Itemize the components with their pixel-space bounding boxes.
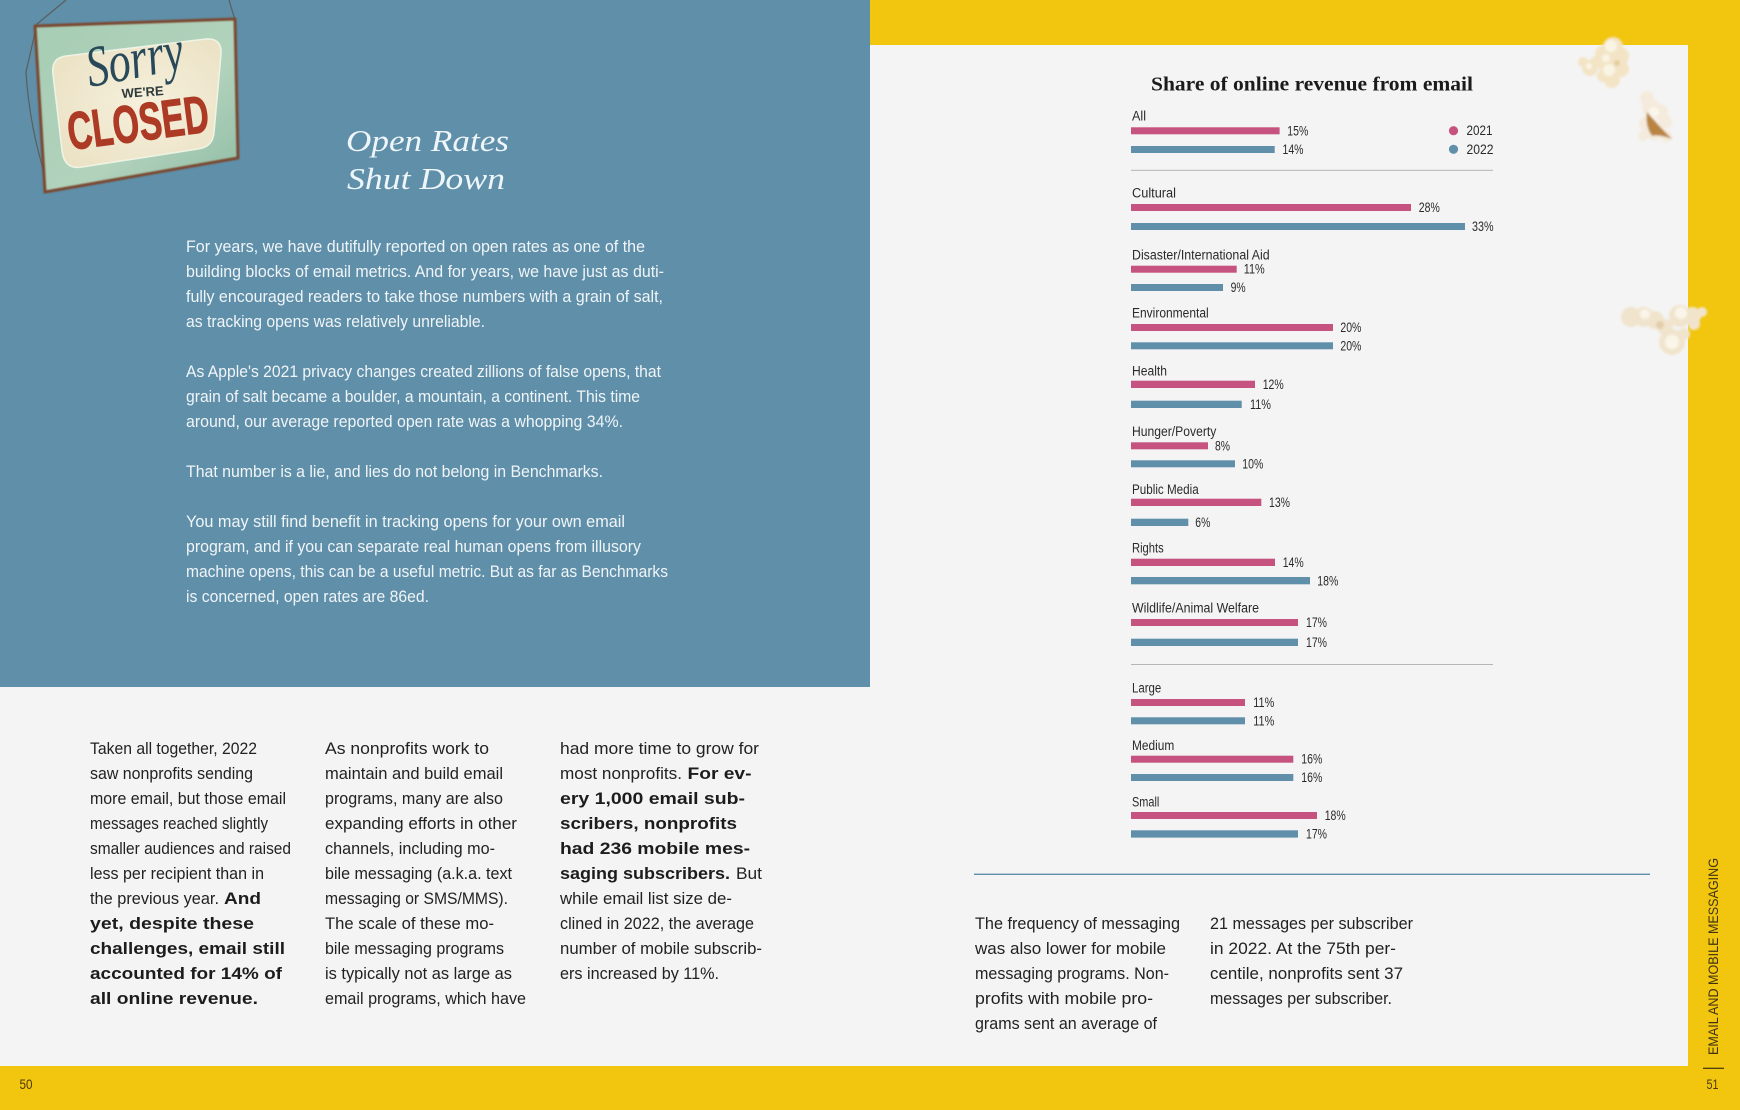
category: Wildlife/Animal Welfare: 17% bbox=[1306, 635, 1327, 650]
category: Large bbox=[1131, 680, 1274, 728]
text column 4: messaging programs. Non- bbox=[975, 965, 1169, 983]
category: Hunger/Poverty: Hunger/Poverty bbox=[1132, 424, 1217, 439]
text column 2: The scale of these mo- bbox=[325, 915, 494, 933]
text column 1: smaller audiences and raised bbox=[90, 840, 291, 858]
text column 3: had more time to grow for bbox=[560, 740, 760, 758]
text block: open rates copy: That number is a lie, and lies do not belong in Benchmarks. bbox=[186, 463, 603, 481]
text block: open rates copy: building blocks of email metrics. And for years, we have just as duti- bbox=[186, 263, 664, 281]
category: Rights bbox=[1131, 540, 1338, 588]
category: Cultural: 28% bbox=[1419, 200, 1440, 215]
text column 2: programs, many are also bbox=[325, 790, 503, 808]
category: Environmental bbox=[1131, 305, 1361, 353]
text column 3: clined in 2022, the average bbox=[560, 915, 754, 933]
category: Hunger/Poverty: 10% bbox=[1242, 456, 1263, 471]
text column 1: accounted for 14% of bbox=[90, 965, 283, 983]
text column 3: number of mobile subscrib- bbox=[560, 940, 762, 958]
category: Rights: 18% bbox=[1317, 574, 1338, 588]
category: Medium: 16% bbox=[1301, 770, 1322, 785]
category: All: 14% bbox=[1282, 142, 1304, 157]
chart: share of online revenue from email bbox=[1131, 74, 1494, 842]
text column 3: while email list size de- bbox=[559, 890, 732, 908]
chart title: Share of online revenue from email bbox=[1151, 74, 1474, 96]
text block: open rates copy: As Apple's 2021 privacy changes created zillions of false opens, that bbox=[186, 363, 661, 381]
category: Rights: 14% bbox=[1283, 555, 1304, 570]
heading: open rates shut down bbox=[346, 123, 509, 196]
text column 1: messages reached slightly bbox=[90, 815, 269, 833]
panel: blue open rates bbox=[0, 0, 870, 687]
legend: 2022 bbox=[1466, 142, 1494, 157]
text block: open rates copy: You may still find benefit in tracking opens for your own email bbox=[186, 513, 625, 531]
category: Small: 18% bbox=[1325, 808, 1346, 823]
category: Cultural: Cultural bbox=[1132, 185, 1176, 200]
category: Disaster/International Aid: Disaster/International Aid bbox=[1132, 247, 1270, 262]
category: Wildlife/Animal Welfare bbox=[1131, 600, 1327, 650]
category: Small: 17% bbox=[1306, 826, 1327, 842]
text column 4: grams sent an average of bbox=[975, 1015, 1157, 1033]
icon: popcorn right bbox=[1621, 305, 1707, 355]
right yellow band bbox=[1688, 0, 1740, 1110]
text column 3: saging subscribers. bbox=[560, 865, 730, 883]
bottom yellow band bbox=[0, 1066, 1740, 1110]
text column 1: Taken all together, 2022 bbox=[90, 740, 257, 758]
category: All: All bbox=[1132, 108, 1146, 124]
category: Medium: 16% bbox=[1301, 752, 1322, 767]
text column 2: bile messaging (a.k.a. text bbox=[325, 865, 512, 883]
text block: open rates copy: as tracking opens was relatively unreliable. bbox=[186, 313, 485, 331]
text column 4: was also lower for mobile bbox=[974, 940, 1166, 958]
category: Hunger/Poverty: 8% bbox=[1215, 438, 1230, 453]
text column 2: is typically not as large as bbox=[325, 965, 512, 983]
category: Wildlife/Animal Welfare: 17% bbox=[1306, 615, 1327, 630]
category: Environmental: 20% bbox=[1340, 338, 1361, 353]
category: Rights: Rights bbox=[1132, 540, 1164, 555]
text column 2: As nonprofits work to bbox=[325, 740, 489, 758]
icon: closed sign: Sorry bbox=[80, 17, 189, 100]
category: Health: Health bbox=[1132, 364, 1167, 379]
category: Cultural: 33% bbox=[1472, 219, 1494, 234]
category: Small: Small bbox=[1132, 795, 1159, 810]
text block: open rates copy: is concerned, open rates are 86ed. bbox=[186, 588, 429, 606]
category: Public Media bbox=[1131, 482, 1290, 530]
text column 2: expanding efforts in other bbox=[325, 815, 518, 833]
text column 3: ery 1,000 email sub- bbox=[560, 790, 745, 808]
heading: open rates shut down: Shut Down bbox=[347, 161, 505, 196]
top yellow band bbox=[870, 0, 1740, 45]
text column 2: email programs, which have bbox=[325, 990, 526, 1008]
text column 1: And bbox=[224, 890, 261, 908]
page number 50: 50 bbox=[20, 1077, 32, 1092]
text column 2: bile messaging programs bbox=[325, 940, 504, 958]
text block: open rates copy: machine opens, this can be a useful metric. But as far as Benchmarks bbox=[186, 563, 668, 581]
icon: closed sign: CLOSED bbox=[64, 85, 212, 162]
legend bbox=[1449, 123, 1494, 157]
category: Large: Large bbox=[1132, 680, 1161, 695]
text column 4 bbox=[974, 915, 1180, 1033]
text column 5: 21 messages per subscriber bbox=[1210, 915, 1413, 933]
text column 2 bbox=[325, 740, 526, 1008]
text column 5: messages per subscriber. bbox=[1210, 990, 1392, 1008]
icon: popcorn top bbox=[1578, 37, 1629, 88]
text block: open rates copy: For years, we have dutifully reported on open rates as one of the bbox=[186, 238, 645, 256]
category: All: 15% bbox=[1287, 124, 1308, 138]
category: Large: 11% bbox=[1253, 695, 1274, 710]
text column 3: For ev- bbox=[688, 765, 752, 783]
category: Health bbox=[1131, 364, 1284, 412]
category: Medium bbox=[1131, 738, 1322, 785]
text column 4: profits with mobile pro- bbox=[975, 990, 1153, 1008]
text column 3: ers increased by 11%. bbox=[560, 965, 719, 983]
section label: EMAIL AND MOBILE MESSAGING bbox=[1705, 858, 1721, 1055]
category: Small bbox=[1131, 795, 1346, 842]
text column 4: The frequency of messaging bbox=[975, 915, 1180, 933]
category: All bbox=[1131, 108, 1308, 157]
text column 1: saw nonprofits sending bbox=[90, 765, 253, 783]
text column 1: the previous year. bbox=[90, 890, 219, 908]
heading: open rates shut down: Open Rates bbox=[346, 123, 509, 158]
icon: popcorn middle bbox=[1638, 91, 1672, 142]
text column 1: challenges, email still bbox=[90, 940, 285, 958]
text column 1 bbox=[90, 740, 291, 1008]
text block: open rates copy: around, our average reported open rate was a whopping 34%. bbox=[186, 413, 623, 431]
text column 3: scribers, nonprofits bbox=[560, 815, 737, 833]
category: Large: 11% bbox=[1253, 713, 1274, 728]
category: Cultural bbox=[1131, 185, 1494, 234]
text block: open rates copy bbox=[186, 238, 668, 606]
text column 5: in 2022. At the 75th per- bbox=[1210, 940, 1396, 958]
text column 3: most nonprofits. bbox=[560, 765, 682, 783]
category: Disaster/International Aid: 11% bbox=[1244, 262, 1265, 277]
text column 1: less per recipient than in bbox=[90, 865, 264, 883]
category: Medium: Medium bbox=[1132, 738, 1174, 753]
text block: open rates copy: program, and if you can separate real human opens from illusory bbox=[186, 538, 642, 556]
legend: 2021 bbox=[1466, 123, 1492, 138]
category: Public Media: 13% bbox=[1269, 495, 1290, 510]
category: Public Media: Public Media bbox=[1132, 482, 1199, 497]
category: Environmental: Environmental bbox=[1132, 305, 1209, 320]
text column 2: maintain and build email bbox=[325, 765, 503, 783]
category: Disaster/International Aid bbox=[1131, 247, 1270, 295]
category: Hunger/Poverty bbox=[1131, 424, 1263, 471]
text column 1: all online revenue. bbox=[90, 990, 258, 1008]
text column 3 bbox=[559, 740, 762, 983]
text column 2: messaging or SMS/MMS). bbox=[325, 890, 508, 908]
text block: open rates copy: fully encouraged readers to take those numbers with a grain of salt, bbox=[186, 288, 663, 306]
category: Wildlife/Animal Welfare: Wildlife/Animal Welfare bbox=[1132, 600, 1259, 615]
text column 2: channels, including mo- bbox=[325, 840, 495, 858]
text column 1: more email, but those email bbox=[90, 790, 286, 808]
category: Health: 11% bbox=[1250, 397, 1271, 412]
page number 51: 51 bbox=[1706, 1077, 1718, 1092]
text column 5 bbox=[1210, 915, 1413, 1008]
text column 3: But bbox=[736, 865, 762, 883]
text block: open rates copy: grain of salt became a boulder, a mountain, a continent. This time bbox=[186, 388, 640, 406]
icon: closed sign: WE'RE bbox=[121, 83, 164, 101]
category: Health: 12% bbox=[1263, 377, 1284, 392]
category: Public Media: 6% bbox=[1195, 515, 1210, 530]
text column 1: yet, despite these bbox=[90, 915, 254, 933]
text column 3: had 236 mobile mes- bbox=[560, 840, 750, 858]
text column 5: centile, nonprofits sent 37 bbox=[1210, 965, 1403, 983]
category: Disaster/International Aid: 9% bbox=[1231, 280, 1246, 295]
category: Environmental: 20% bbox=[1340, 320, 1361, 335]
icon: closed sign bbox=[26, 0, 238, 192]
